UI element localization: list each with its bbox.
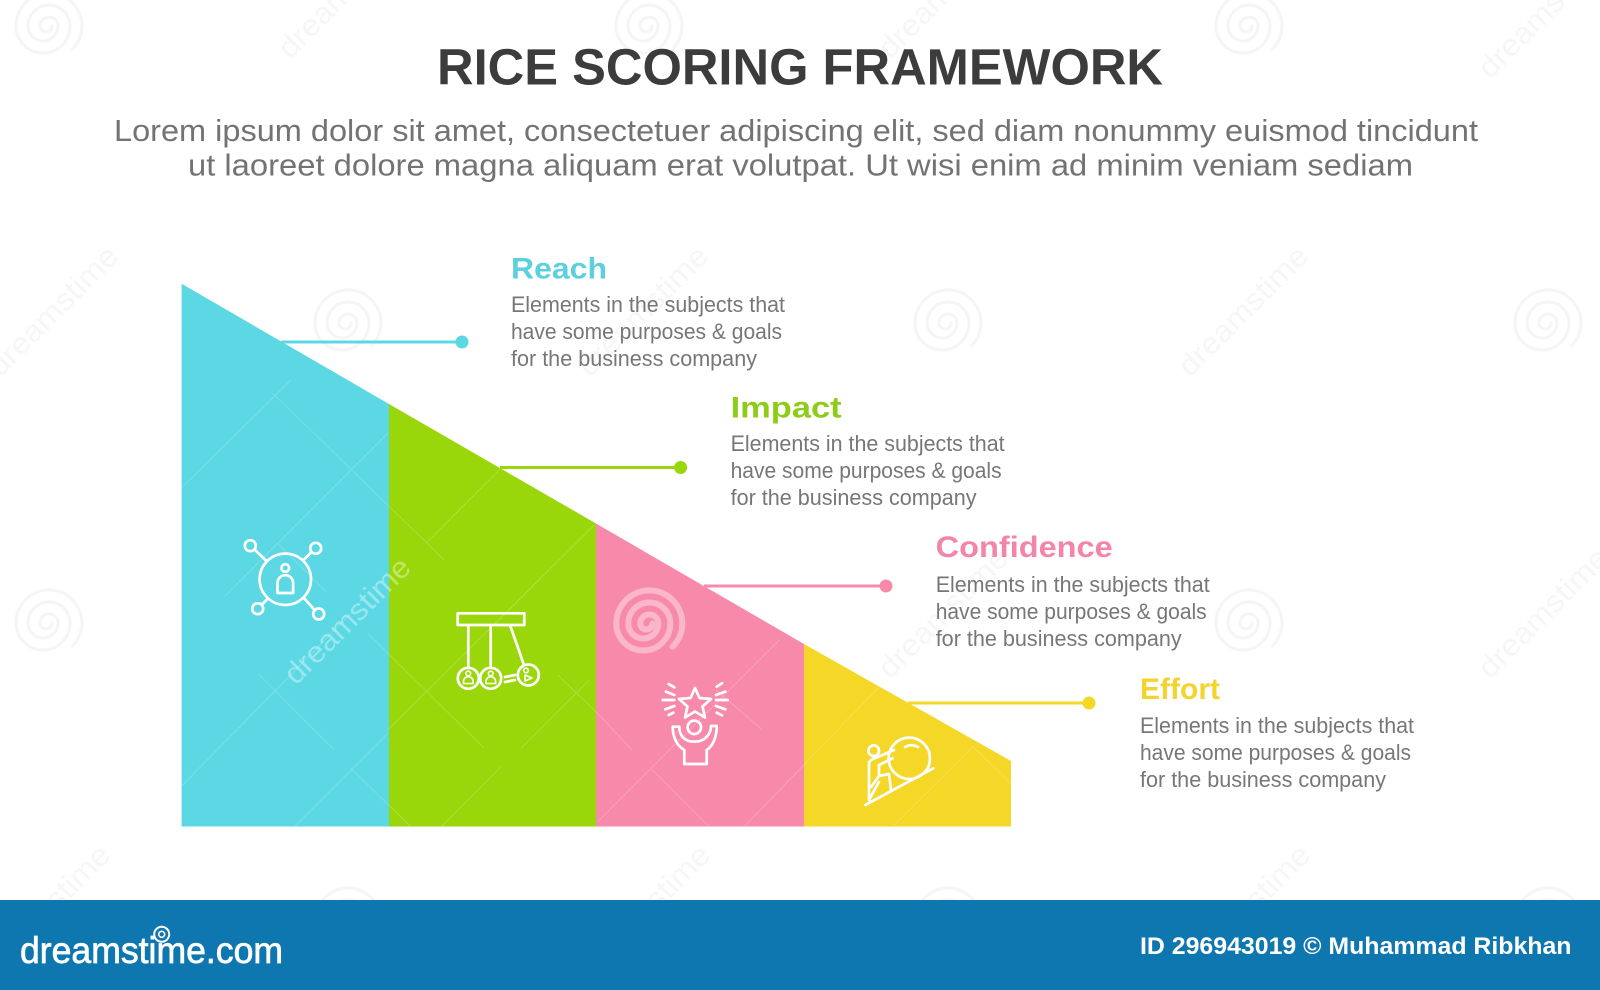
text block: impact: for the business company [731,485,977,510]
text block: impact [731,392,1005,510]
text block: impact: Elements in the subjects that [731,431,1005,456]
segment: effort [804,644,1011,826]
background watermark: dreamstime [572,239,715,383]
text block: impact: Impact [731,392,842,424]
text block: confidence: Confidence [936,531,1113,564]
icon: reach network [245,540,324,620]
text block: confidence [936,531,1210,651]
text block: effort: for the business company [1140,767,1386,792]
text block: reach: for the business company [511,346,757,371]
background watermark: dreamstime [1172,239,1315,383]
text block: confidence: Elements in the subjects that [936,572,1210,597]
background watermark: dreamstime [1174,838,1317,982]
text block: reach: Reach [511,252,607,286]
background watermark: dreamstime [574,838,717,982]
descending triangular chart [182,284,1011,826]
icon: effort boulder [865,738,933,805]
icon: impact newton cradle [458,613,539,689]
segment: reach [182,284,389,826]
text block: reach: have some purposes & goals [511,319,782,344]
text block: effort: Elements in the subjects that [1140,713,1414,738]
text block: effort [1140,673,1414,792]
text block: impact: have some purposes & goals [731,458,1002,483]
connector: effort [908,696,1096,710]
title: RICE SCORING FRAMEWORK [437,38,1163,96]
connector: confidence [704,580,892,592]
background watermark: dreamstime [872,541,1015,685]
subtitle [114,113,1478,182]
text block: effort: have some purposes & goals [1140,740,1411,765]
chart watermark [278,551,682,691]
connector: impact [500,461,687,474]
footer banner [0,900,1600,990]
text block: confidence: have some purposes & goals [936,599,1207,624]
footer credit: ID 296943019 © Muhammad Ribkhan [1140,933,1572,960]
text block: confidence: for the business company [936,626,1182,651]
text block: reach [511,252,785,371]
text block: effort: Effort [1140,673,1220,706]
segment: impact [389,404,596,826]
segment: confidence [596,524,804,826]
text block: reach: Elements in the subjects that [511,292,785,317]
subtitle: ut laoreet dolore magna aliquam erat volutpat. Ut wisi enim ad minim veniam sediam [188,148,1413,182]
footer logo: dreamstime.com [20,930,283,971]
icon: confidence star and person [663,683,728,764]
chart watermark: dreamstime [278,551,418,691]
connector: reach [281,336,468,348]
subtitle: Lorem ipsum dolor sit amet, consectetuer adipiscing elit, sed diam nonummy euismod tincidunt [114,113,1478,148]
